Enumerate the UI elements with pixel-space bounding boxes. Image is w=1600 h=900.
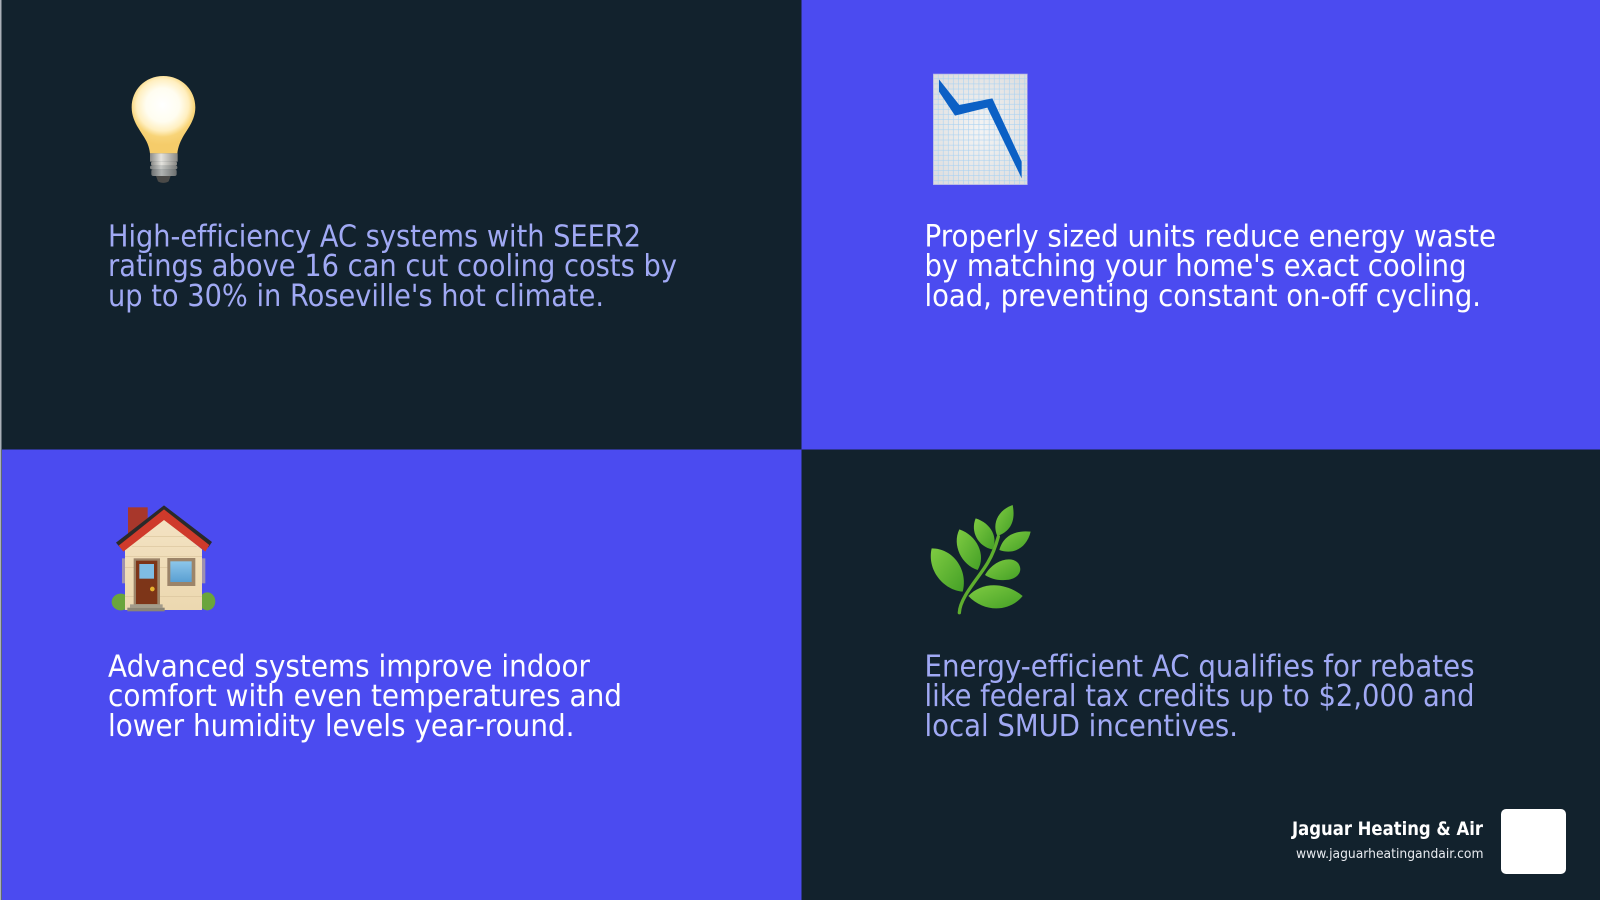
text: proper sizing: load, preventing constant on-off cycling. (924, 279, 1481, 314)
icon: house (112, 505, 215, 611)
text: proper sizing (924, 220, 1496, 314)
text: indoor comfort (108, 650, 622, 744)
brand footer (1290, 809, 1566, 874)
brand name: Jaguar Heating & Air (1290, 818, 1484, 840)
brand url: www.jaguarheatingandair.com (1296, 847, 1484, 862)
icon: chart decreasing (933, 74, 1027, 185)
panel: efficiency savings (2, 0, 802, 450)
text: indoor comfort: comfort with even temperatures and (108, 679, 622, 714)
logo placeholder (1501, 809, 1566, 874)
panel: rebates (802, 450, 1600, 900)
text: efficiency savings: ratings above 16 can cut cooling costs by (108, 249, 677, 284)
text: rebates (924, 650, 1474, 744)
text: indoor comfort: lower humidity levels year-round. (108, 709, 574, 744)
panel: indoor comfort (2, 450, 802, 900)
icon: herb sprig (931, 505, 1031, 613)
text: rebates: Energy-efficient AC qualifies for rebates (924, 650, 1474, 684)
text: efficiency savings (108, 220, 677, 314)
text: rebates: like federal tax credits up to $2,000 and (924, 679, 1474, 714)
text: rebates: local SMUD incentives. (924, 709, 1238, 744)
text: indoor comfort: Advanced systems improve indoor (108, 650, 591, 684)
text: efficiency savings: up to 30% in Roseville's hot climate. (108, 279, 604, 314)
text: proper sizing: Properly sized units reduce energy waste (924, 220, 1496, 254)
text: efficiency savings: High-efficiency AC systems with SEER2 (108, 220, 641, 254)
panel: proper sizing (802, 0, 1600, 450)
icon: light bulb (132, 76, 195, 183)
text: proper sizing: by matching your home's exact cooling (924, 249, 1466, 284)
